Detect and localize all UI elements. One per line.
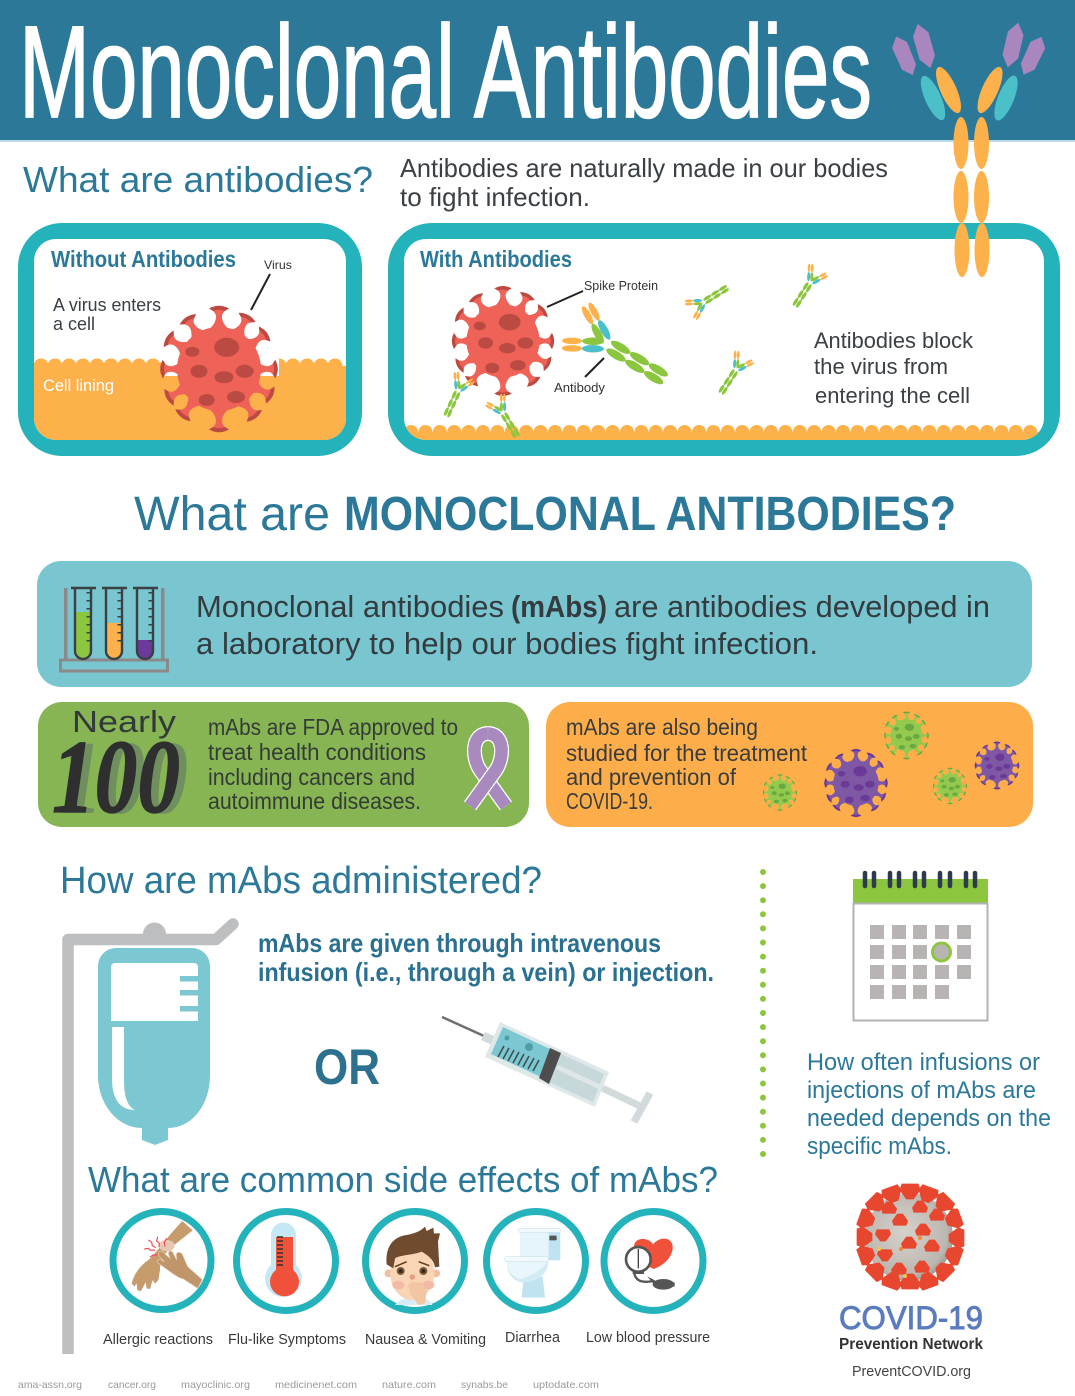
text: fda approved: autoimmune diseases. xyxy=(208,788,421,814)
heading: how are mabs administered: How are mAbs administered? xyxy=(60,860,542,902)
header banner xyxy=(0,0,1075,145)
definition text: a laboratory to help our bodies fight infection. xyxy=(196,626,818,661)
definition text xyxy=(196,589,990,661)
sources: mayoclinic.org xyxy=(181,1379,250,1391)
label: cell lining: Cell lining xyxy=(43,376,114,395)
side effect: diarrhea xyxy=(486,1212,586,1346)
text: antibodies block the virus xyxy=(814,328,974,408)
label: Flu-like Symptoms xyxy=(228,1332,346,1348)
text: antibodies block the virus: Antibodies block xyxy=(814,328,974,353)
side effect: nausea and vomiting xyxy=(365,1212,486,1348)
panel: with antibodies xyxy=(388,223,1060,456)
label: spike protein: Spike Protein xyxy=(584,278,658,293)
text: given through infusion: infusion (i.e., through a vein) or injection. xyxy=(258,957,714,987)
text: how often xyxy=(807,1049,1051,1160)
icon: large antibody xyxy=(555,297,681,405)
icon: virus xyxy=(160,306,278,432)
text: a virus enters a cell xyxy=(53,295,161,334)
heading: without antibodies: Without Antibodies xyxy=(51,246,236,272)
icon: coronavirus xyxy=(856,1184,964,1291)
text: a virus enters a cell: a cell xyxy=(53,314,95,334)
panel: without antibodies xyxy=(18,223,362,456)
number: 100: 100 xyxy=(60,719,188,836)
text: given through infusion: mAbs are given through intravenous xyxy=(258,928,661,958)
side effect: low blood pressure xyxy=(586,1212,710,1346)
intro text: to fight infection. xyxy=(400,182,590,212)
text: covid treatment: COVID-19. xyxy=(566,788,653,814)
heading: what are monoclonal antibodies: MONOCLONAL ANTIBODIES? xyxy=(344,488,956,541)
heading: common side effects: What are common side effects of mAbs? xyxy=(88,1159,718,1200)
icon: virus xyxy=(452,286,554,396)
text: covid treatment: mAbs are also being xyxy=(566,714,758,740)
logo: covid-19 prevention network xyxy=(839,1184,983,1380)
logo subtitle: Prevention Network xyxy=(839,1336,983,1353)
label: or: OR xyxy=(314,1039,380,1095)
pointer: virus xyxy=(251,274,270,310)
text: how often: needed depends on the xyxy=(807,1105,1051,1132)
label: virus: Virus xyxy=(264,258,292,272)
sources: nature.com xyxy=(382,1379,436,1391)
text: covid treatment: and prevention of xyxy=(566,764,737,790)
icon: iv bag and stand xyxy=(68,918,239,1354)
heading: with antibodies: With Antibodies xyxy=(420,246,572,272)
icon: header antibody xyxy=(889,21,1049,277)
sources: uptodate.com xyxy=(533,1379,599,1391)
panel: covid research xyxy=(546,702,1033,827)
icon: viruses xyxy=(763,711,1019,817)
heading: what are antibodies: What are antibodies? xyxy=(23,159,373,200)
sources: cancer.org xyxy=(108,1379,156,1391)
logo url: PreventCOVID.org xyxy=(852,1363,971,1380)
icon: free antibodies xyxy=(435,261,830,444)
definition text: Monoclonal antibodies xyxy=(196,589,504,624)
label: Nausea & Vomiting xyxy=(365,1332,486,1348)
icon: calendar xyxy=(853,873,988,1020)
definition text: (mAbs) xyxy=(511,589,607,624)
icon: test tubes xyxy=(60,588,168,671)
side effect: allergic reactions xyxy=(103,1212,213,1348)
pointer: spike protein xyxy=(547,291,583,307)
text: fda approved: treat health conditions xyxy=(208,739,426,765)
panel: definition xyxy=(37,561,1032,687)
intro text xyxy=(400,153,888,212)
text: fda approved: mAbs are FDA approved to xyxy=(208,714,458,740)
text: how often: How often infusions or xyxy=(807,1049,1040,1076)
text: fda approved: including cancers and xyxy=(208,764,415,790)
text: how often: specific mAbs. xyxy=(807,1133,952,1160)
label: nearly: Nearly xyxy=(72,704,177,739)
heading: what are monoclonal antibodies xyxy=(134,488,956,541)
text: antibodies block the virus: entering the cell xyxy=(815,383,970,408)
text: how often: injections of mAbs are xyxy=(807,1077,1036,1104)
sources: ama-assn.org xyxy=(18,1379,82,1391)
heading: what are monoclonal antibodies: What are xyxy=(134,488,330,541)
text: a virus enters a cell: A virus enters xyxy=(53,295,161,315)
label: Low blood pressure xyxy=(586,1330,710,1346)
number: 100: 100 xyxy=(52,718,180,835)
definition text: are antibodies developed in xyxy=(614,589,990,624)
text: covid treatment: studied for the treatment xyxy=(566,740,808,766)
side effect: flu-like symptoms xyxy=(228,1212,346,1348)
sources: medicinenet.com xyxy=(275,1379,357,1391)
dotted divider xyxy=(760,872,766,1158)
text: fda approved xyxy=(208,714,458,814)
text: given through infusion xyxy=(258,928,714,987)
pointer: antibody xyxy=(585,358,604,377)
logo text: COVID-19 xyxy=(839,1300,983,1336)
icon: syringe xyxy=(442,1017,650,1122)
text: antibodies block the virus: the virus from xyxy=(814,354,948,379)
text: covid treatment xyxy=(566,714,808,814)
panel: nearly 100 xyxy=(38,702,529,836)
intro text: Antibodies are naturally made in our bodies xyxy=(400,153,888,183)
sources: synabs.be xyxy=(461,1379,508,1391)
icon: ribbon xyxy=(470,734,506,806)
sources xyxy=(18,1379,599,1391)
label: Diarrhea xyxy=(505,1330,561,1346)
label: Allergic reactions xyxy=(103,1332,213,1348)
label: antibody: Antibody xyxy=(554,381,606,395)
